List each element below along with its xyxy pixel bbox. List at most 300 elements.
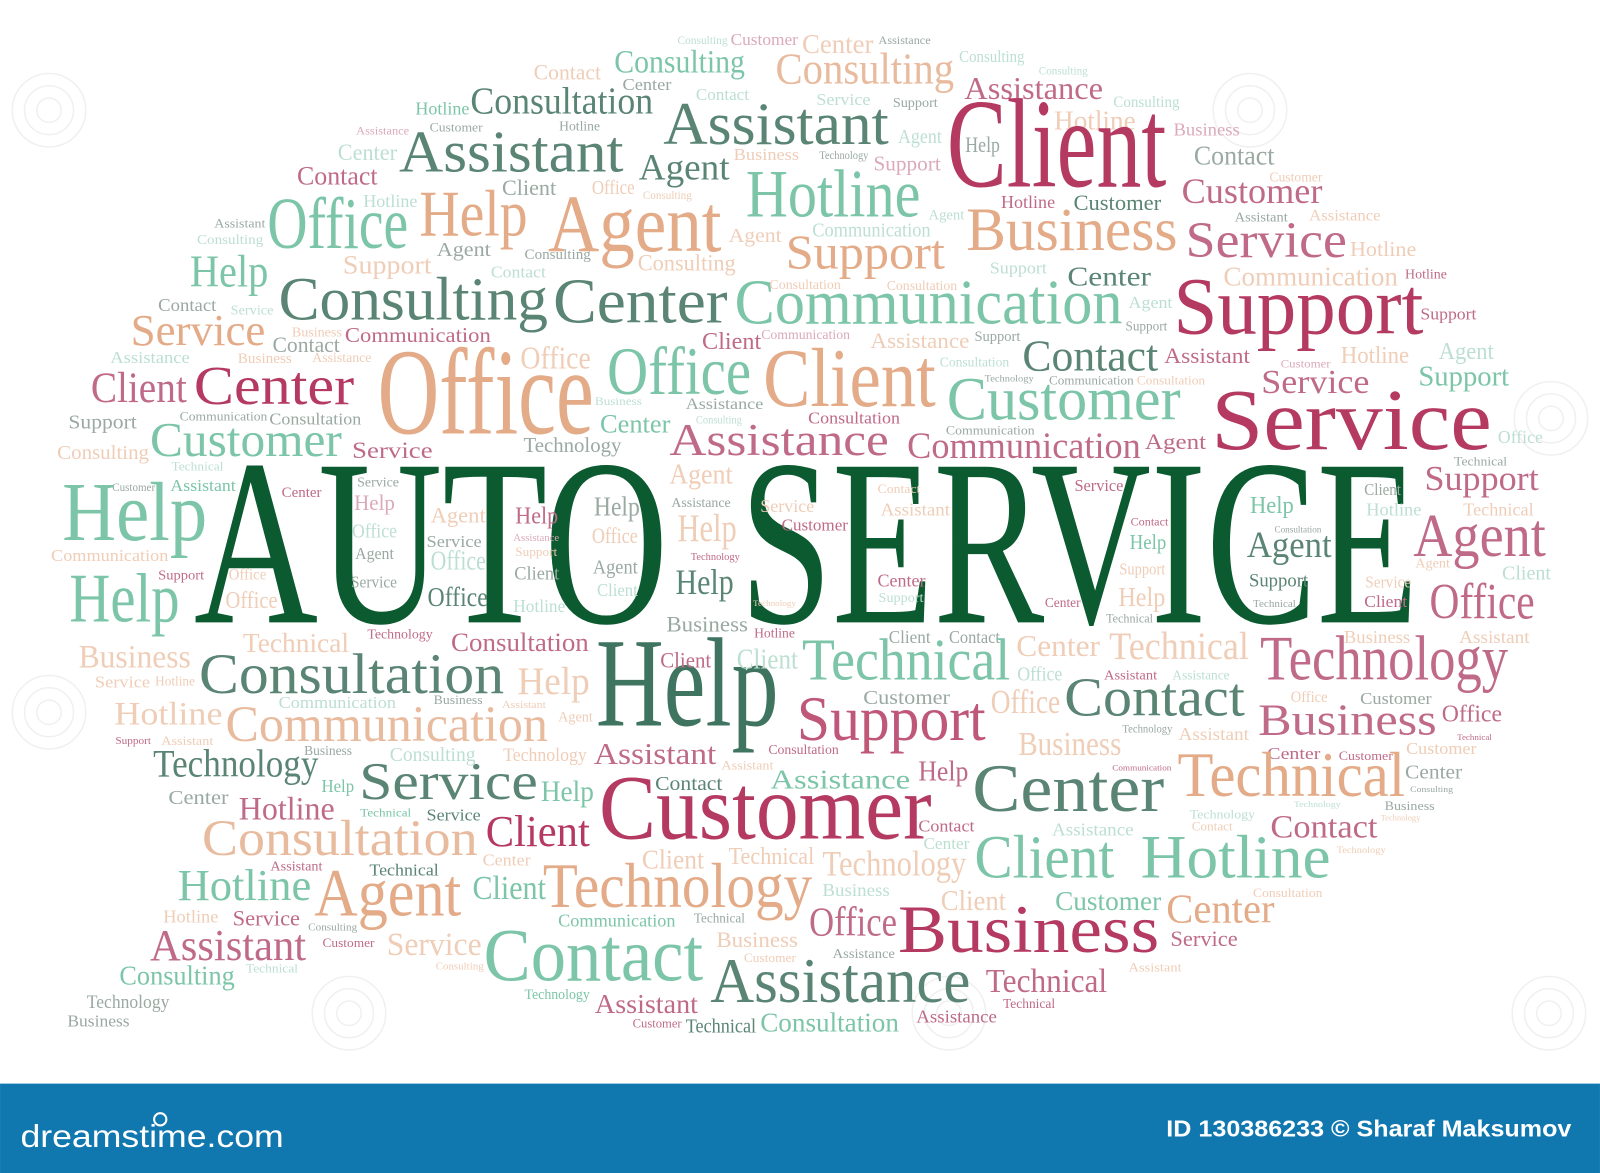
word cloud: Customer bbox=[633, 1016, 682, 1030]
word cloud: Consultation bbox=[808, 408, 900, 427]
word cloud: Technology bbox=[87, 992, 170, 1013]
word cloud: Customer bbox=[1281, 358, 1331, 370]
word cloud: Agent bbox=[1145, 429, 1207, 454]
word cloud: Assistant bbox=[1459, 627, 1530, 647]
word cloud: Consultation bbox=[269, 409, 361, 428]
word cloud: Business bbox=[238, 351, 292, 367]
word cloud: Technical bbox=[1463, 499, 1534, 519]
word cloud: Communication bbox=[51, 546, 169, 565]
word cloud: Service bbox=[1261, 364, 1369, 401]
word: Office: Office bbox=[378, 326, 594, 461]
word cloud: Hotline bbox=[163, 906, 218, 926]
word cloud: Technology bbox=[1122, 724, 1173, 736]
word cloud: Assistant bbox=[721, 758, 774, 772]
word cloud: Business bbox=[822, 880, 890, 900]
word cloud: Technology bbox=[1190, 807, 1256, 821]
word cloud: Consulting bbox=[638, 250, 736, 276]
word cloud: Service bbox=[131, 305, 265, 355]
word cloud: Agent bbox=[558, 709, 593, 725]
word cloud: Help bbox=[321, 776, 354, 796]
word cloud: Support bbox=[1125, 319, 1168, 334]
word cloud: Office bbox=[520, 340, 591, 375]
word cloud: Office bbox=[1498, 427, 1543, 447]
word cloud: Hotline bbox=[1001, 192, 1055, 212]
word cloud: Agent bbox=[437, 239, 491, 261]
word cloud: Customer bbox=[863, 687, 950, 709]
word cloud: Client bbox=[702, 328, 761, 355]
word cloud: Service bbox=[387, 927, 482, 963]
word cloud: Office bbox=[352, 521, 397, 543]
word cloud: Support bbox=[515, 545, 558, 559]
word: Contact: Contact bbox=[484, 915, 703, 998]
word cloud: Business bbox=[595, 396, 642, 408]
word cloud: Center bbox=[923, 834, 970, 853]
footer bar bbox=[0, 1084, 1600, 1173]
word cloud: Help bbox=[517, 660, 590, 703]
word cloud: Support bbox=[990, 258, 1047, 277]
word cloud: Agent bbox=[1415, 555, 1450, 570]
word: Technical: Technical bbox=[802, 627, 1010, 693]
word cloud: Contact bbox=[297, 161, 378, 191]
word cloud: Communication bbox=[1049, 374, 1134, 388]
word cloud: Technology bbox=[523, 433, 622, 457]
word cloud: Business bbox=[1018, 726, 1121, 763]
word cloud: Business bbox=[304, 743, 352, 758]
word cloud: Consulting bbox=[678, 35, 728, 47]
word cloud: Communication bbox=[558, 910, 676, 930]
word cloud: Consultation bbox=[769, 277, 841, 292]
word cloud: Technology bbox=[367, 627, 433, 642]
word: Hotline: Hotline bbox=[746, 156, 920, 231]
word cloud: Agent bbox=[729, 225, 782, 247]
word cloud: Consultation bbox=[768, 742, 839, 757]
word cloud: Business bbox=[666, 612, 748, 637]
word cloud: Client bbox=[737, 644, 798, 675]
word cloud: Center bbox=[282, 485, 322, 501]
word cloud: Help bbox=[965, 132, 1000, 157]
word cloud: Assistance bbox=[671, 495, 731, 510]
word cloud: Communication bbox=[279, 693, 396, 712]
word cloud: Technology bbox=[1337, 845, 1386, 855]
word cloud: Client bbox=[889, 627, 931, 647]
word cloud: Technology bbox=[153, 742, 319, 785]
word cloud: Technical bbox=[1106, 611, 1154, 625]
word cloud: Consulting bbox=[959, 47, 1025, 66]
word cloud: Hotline bbox=[513, 596, 565, 616]
word cloud: Technology bbox=[691, 552, 741, 563]
word cloud: Help bbox=[594, 490, 640, 521]
word cloud: Help bbox=[676, 562, 734, 602]
word cloud: Support bbox=[68, 412, 137, 434]
word cloud: Consulting bbox=[57, 442, 149, 464]
word cloud: Help bbox=[419, 179, 528, 251]
word cloud: Business bbox=[292, 325, 342, 340]
word cloud: Assistance bbox=[1052, 820, 1134, 840]
word cloud: Office bbox=[607, 334, 751, 409]
word cloud: Client bbox=[472, 870, 546, 907]
word: Agent: Agent bbox=[548, 178, 722, 269]
word cloud: Business bbox=[1385, 799, 1435, 813]
word cloud: Client bbox=[660, 647, 712, 672]
word cloud: Office bbox=[1017, 664, 1062, 686]
word cloud: Hotline bbox=[239, 791, 335, 827]
title bbox=[194, 411, 1418, 674]
word cloud: Client bbox=[1364, 592, 1407, 611]
word: Business: Business bbox=[966, 196, 1178, 264]
word cloud: Contact bbox=[918, 817, 975, 836]
word: Customer: Customer bbox=[599, 757, 932, 859]
word cloud: Assistance bbox=[312, 350, 372, 365]
word cloud: Service bbox=[1170, 926, 1238, 951]
word cloud: Assistant bbox=[170, 476, 236, 495]
word: Support: Support bbox=[797, 684, 986, 754]
word cloud: Contact bbox=[534, 60, 602, 85]
word cloud: Assistant bbox=[161, 734, 214, 748]
word cloud: Center bbox=[1405, 762, 1462, 784]
word cloud: Contact bbox=[272, 332, 341, 357]
word: Business: Business bbox=[898, 892, 1159, 967]
word cloud: Support bbox=[1418, 362, 1509, 393]
word cloud: Communication bbox=[1112, 763, 1171, 772]
word cloud: Client bbox=[486, 806, 590, 856]
image credit: ID 130386233 © Sharaf Maksumov bbox=[1166, 1116, 1571, 1142]
word cloud: Support bbox=[1420, 304, 1477, 323]
word cloud: Consulting bbox=[1039, 65, 1088, 77]
word cloud: Contact bbox=[696, 85, 749, 104]
word cloud: Business bbox=[1173, 120, 1240, 140]
title: AUTO bbox=[194, 411, 668, 674]
word cloud: Communication bbox=[1223, 261, 1398, 292]
word cloud: Service bbox=[231, 302, 274, 317]
word cloud: Assistance bbox=[1309, 207, 1381, 224]
word cloud: Assistance bbox=[513, 533, 560, 544]
word cloud: Support bbox=[115, 736, 151, 747]
word cloud: Customer bbox=[1055, 885, 1161, 916]
word cloud: Service bbox=[427, 805, 481, 824]
word cloud: Center bbox=[1067, 261, 1151, 292]
word cloud: Help bbox=[62, 466, 207, 559]
word: Support: Support bbox=[1173, 261, 1424, 352]
word cloud: Customer bbox=[322, 936, 375, 950]
word cloud: Office bbox=[809, 900, 897, 945]
word cloud: Support bbox=[1249, 571, 1309, 592]
word cloud: Consultation bbox=[451, 627, 589, 657]
word cloud: Customer bbox=[1269, 170, 1323, 185]
word cloud: Assistant bbox=[595, 988, 698, 1019]
word cloud: Assistant bbox=[150, 920, 307, 970]
word cloud: Assistance bbox=[879, 35, 931, 47]
word cloud: Consulting bbox=[525, 247, 591, 263]
word cloud: Business bbox=[67, 1011, 130, 1030]
word cloud: Service bbox=[1365, 573, 1411, 592]
word cloud: Support bbox=[158, 568, 204, 583]
word cloud: Support bbox=[1424, 459, 1539, 498]
word cloud: Technical bbox=[243, 627, 349, 658]
word cloud: Agent bbox=[929, 207, 964, 223]
word cloud: Consultation bbox=[1253, 886, 1322, 900]
word cloud: Contact bbox=[1192, 820, 1233, 834]
word: Client: Client bbox=[974, 824, 1114, 892]
word cloud: Hotline bbox=[1341, 342, 1409, 369]
word cloud: Support bbox=[873, 151, 941, 175]
word cloud: Assistance bbox=[833, 946, 895, 961]
word cloud: Hotline bbox=[363, 191, 417, 211]
word cloud: Help bbox=[678, 507, 737, 550]
word cloud: Hotline bbox=[754, 626, 795, 641]
word cloud: Client bbox=[597, 580, 638, 600]
word cloud: Technical bbox=[369, 860, 439, 879]
word cloud: Technical bbox=[1109, 625, 1249, 668]
word cloud: Assistance bbox=[916, 1006, 997, 1026]
word cloud: Office bbox=[1442, 700, 1502, 727]
word cloud: Client bbox=[1502, 563, 1551, 585]
word cloud: Help bbox=[354, 490, 395, 515]
word cloud: Communication bbox=[946, 424, 1035, 438]
word cloud: Agent bbox=[593, 556, 638, 578]
word cloud: Business bbox=[716, 927, 798, 952]
word cloud: Support bbox=[786, 224, 945, 279]
word: Assistance: Assistance bbox=[710, 946, 970, 1016]
word cloud: Assistance bbox=[669, 414, 889, 465]
word cloud: Hotline bbox=[155, 674, 195, 689]
word cloud: Contact bbox=[1270, 810, 1378, 846]
word cloud: Agent bbox=[669, 460, 733, 491]
word cloud: Hotline bbox=[559, 119, 600, 134]
word: Consultation: Consultation bbox=[199, 643, 504, 706]
word cloud: Consulting bbox=[119, 960, 235, 991]
word cloud: Assistant bbox=[399, 118, 624, 184]
word cloud: Agent bbox=[639, 147, 730, 188]
word cloud: Customer bbox=[430, 121, 483, 135]
word cloud: Technical bbox=[1454, 454, 1508, 468]
word: Consultation: Consultation bbox=[202, 811, 478, 867]
word cloud: Center bbox=[1267, 744, 1321, 763]
word cloud: Center bbox=[1016, 629, 1100, 663]
word cloud: Client bbox=[642, 843, 704, 874]
word cloud: Contact bbox=[1064, 666, 1245, 727]
word cloud: Customer bbox=[1406, 739, 1477, 758]
word cloud: Client bbox=[1364, 480, 1401, 499]
word cloud: Technology bbox=[503, 745, 587, 766]
word: Technology: Technology bbox=[543, 851, 813, 921]
word: Communication: Communication bbox=[226, 697, 548, 753]
word cloud: Assistant bbox=[1235, 209, 1288, 224]
logo wordmark: dreamstime.com bbox=[20, 1118, 284, 1154]
word cloud: Technical bbox=[986, 963, 1107, 1000]
word cloud: Communication bbox=[761, 327, 850, 342]
word cloud: Contact bbox=[949, 627, 1000, 647]
word cloud: Center bbox=[622, 75, 672, 94]
word cloud: Customer bbox=[744, 951, 796, 965]
word cloud: Consulting bbox=[696, 414, 742, 426]
word cloud: Center bbox=[1045, 595, 1081, 610]
icon: logo spiral bbox=[154, 1113, 166, 1125]
word: Communication: Communication bbox=[735, 267, 1122, 337]
word cloud: Support bbox=[974, 329, 1020, 345]
word cloud: Office bbox=[1291, 689, 1328, 706]
word cloud: Support bbox=[879, 590, 924, 605]
word cloud: Assistance bbox=[686, 396, 763, 413]
word cloud: Assistance bbox=[964, 71, 1103, 106]
word cloud: Center bbox=[338, 140, 397, 166]
word cloud: Help bbox=[1250, 492, 1294, 519]
word cloud: Office bbox=[267, 183, 408, 264]
word cloud: Technical bbox=[171, 459, 224, 473]
word cloud: Contact bbox=[491, 263, 546, 282]
word cloud: Assistance bbox=[1172, 668, 1230, 683]
word cloud: Technical bbox=[686, 1016, 756, 1038]
word cloud: Hotline bbox=[415, 98, 469, 118]
word cloud: Customer bbox=[112, 482, 155, 494]
word cloud: Help bbox=[1118, 581, 1165, 612]
word cloud: Center bbox=[878, 571, 926, 591]
word cloud: Office bbox=[428, 581, 488, 612]
word cloud: Service bbox=[359, 753, 538, 811]
word cloud: Support bbox=[893, 95, 938, 110]
word cloud: Service bbox=[816, 90, 871, 109]
word cloud: Assistance bbox=[770, 764, 910, 795]
word cloud: Center bbox=[194, 355, 354, 416]
word cloud: Help bbox=[515, 502, 558, 529]
word cloud: Assistance bbox=[356, 126, 409, 138]
word cloud: Consulting bbox=[1113, 94, 1180, 111]
word: Consulting: Consulting bbox=[279, 265, 548, 333]
word cloud: Contact bbox=[1022, 330, 1159, 380]
word cloud: Technology bbox=[753, 599, 797, 608]
word cloud: Help bbox=[918, 757, 968, 788]
word cloud: Consulting bbox=[643, 190, 692, 202]
word cloud: Assistant bbox=[1104, 668, 1157, 683]
word cloud: Service bbox=[95, 673, 150, 692]
word cloud: Contact bbox=[1131, 516, 1169, 528]
word: Technical: Technical bbox=[1178, 740, 1405, 810]
word cloud: Communication bbox=[907, 425, 1141, 466]
word cloud: Customer bbox=[1360, 689, 1432, 708]
word cloud: Client bbox=[941, 886, 1006, 917]
word cloud: Customer bbox=[150, 412, 342, 467]
word cloud: Center bbox=[600, 409, 671, 439]
word cloud: Business bbox=[1258, 695, 1437, 745]
word cloud: Center bbox=[168, 787, 229, 809]
word cloud: Office bbox=[229, 567, 267, 584]
word cloud: Technical bbox=[1003, 996, 1055, 1011]
word cloud: Assistant bbox=[270, 858, 323, 873]
word cloud: Office bbox=[431, 544, 486, 575]
word cloud: Technical bbox=[729, 843, 814, 870]
word cloud: Technology bbox=[1294, 800, 1342, 809]
word cloud: Service bbox=[1074, 476, 1123, 495]
word cloud: Help bbox=[1130, 530, 1166, 554]
word cloud: Assistant bbox=[1129, 960, 1182, 974]
word cloud: Business bbox=[734, 145, 799, 164]
word cloud: Customer bbox=[1339, 749, 1393, 763]
word cloud: Business bbox=[1344, 627, 1410, 647]
word cloud: Communication bbox=[812, 220, 931, 242]
word cloud: Agent bbox=[431, 502, 486, 527]
word cloud: Customer bbox=[782, 516, 848, 535]
word cloud: Consulting bbox=[614, 44, 745, 80]
word cloud: Help bbox=[69, 560, 180, 637]
word cloud: Support bbox=[1119, 559, 1166, 578]
word cloud: Consulting bbox=[308, 923, 357, 934]
word cloud: Office bbox=[592, 523, 638, 548]
word: Service: Service bbox=[1211, 372, 1492, 468]
word cloud: Consultation bbox=[940, 354, 1010, 369]
word cloud: Hotline bbox=[1366, 499, 1421, 519]
word cloud: Office bbox=[226, 587, 278, 614]
word cloud: Technical bbox=[1457, 733, 1493, 742]
word cloud: Contact bbox=[1194, 139, 1275, 170]
word cloud: Service bbox=[427, 532, 482, 551]
word cloud: Client bbox=[91, 365, 187, 412]
word cloud: Agent bbox=[1413, 502, 1546, 570]
word cloud: Center bbox=[802, 28, 873, 59]
word cloud: Center bbox=[483, 850, 531, 869]
word cloud: Client bbox=[502, 175, 557, 200]
word cloud: Consulting bbox=[776, 44, 954, 94]
word: Client: Client bbox=[763, 332, 936, 425]
word cloud: Office bbox=[1430, 574, 1535, 630]
word cloud: Assistant bbox=[594, 737, 717, 771]
word cloud: Service bbox=[351, 573, 397, 592]
word cloud: Consulting bbox=[197, 232, 264, 247]
word cloud: Technical bbox=[360, 807, 411, 819]
word cloud: Contact bbox=[878, 482, 921, 496]
word cloud: Hotline bbox=[1054, 105, 1136, 136]
word cloud: Service bbox=[1186, 213, 1347, 269]
word cloud: Consulting bbox=[436, 961, 484, 972]
word: Agent: Agent bbox=[314, 855, 461, 930]
word cloud: Business bbox=[434, 693, 483, 707]
word cloud: Agent bbox=[1439, 338, 1494, 365]
word cloud: Business bbox=[79, 639, 191, 675]
word: Center: Center bbox=[972, 751, 1164, 826]
word cloud: Technical bbox=[246, 961, 299, 975]
word cloud: Assistant bbox=[1164, 343, 1251, 368]
word cloud: Center bbox=[553, 266, 728, 336]
word cloud: Hotline bbox=[1350, 237, 1416, 261]
word cloud: Assistance bbox=[870, 328, 969, 353]
word: Technology: Technology bbox=[1260, 624, 1508, 694]
word cloud: Consulting bbox=[390, 744, 476, 766]
word cloud: Help bbox=[541, 776, 594, 808]
word cloud: Customer bbox=[731, 30, 799, 49]
word cloud: Technology bbox=[985, 374, 1034, 384]
word cloud: Center bbox=[1166, 886, 1275, 931]
word cloud: Agent bbox=[355, 544, 394, 563]
word cloud: Hotline bbox=[178, 860, 311, 910]
word cloud: Assistant bbox=[214, 217, 266, 231]
word: Help: Help bbox=[596, 611, 779, 753]
word cloud: Service bbox=[233, 905, 300, 930]
word cloud: Service bbox=[760, 496, 814, 516]
word cloud: Contact bbox=[655, 773, 723, 795]
word cloud: Help bbox=[190, 246, 268, 297]
word cloud: Communication bbox=[180, 409, 267, 423]
word cloud: Assistant bbox=[502, 700, 546, 711]
word cloud: Support bbox=[343, 249, 432, 279]
word cloud: Customer bbox=[1073, 190, 1162, 215]
word cloud: Hotline bbox=[1405, 267, 1447, 282]
word cloud: Consultation bbox=[1274, 525, 1322, 535]
word cloud: Technology bbox=[819, 150, 869, 162]
word cloud: Technology bbox=[525, 987, 591, 1003]
word cloud: Agent bbox=[1247, 524, 1332, 565]
word: Assistant: Assistant bbox=[663, 91, 889, 158]
word cloud: Client bbox=[514, 564, 560, 585]
word cloud: Assistance bbox=[110, 348, 190, 367]
word cloud: Technology bbox=[822, 843, 966, 883]
